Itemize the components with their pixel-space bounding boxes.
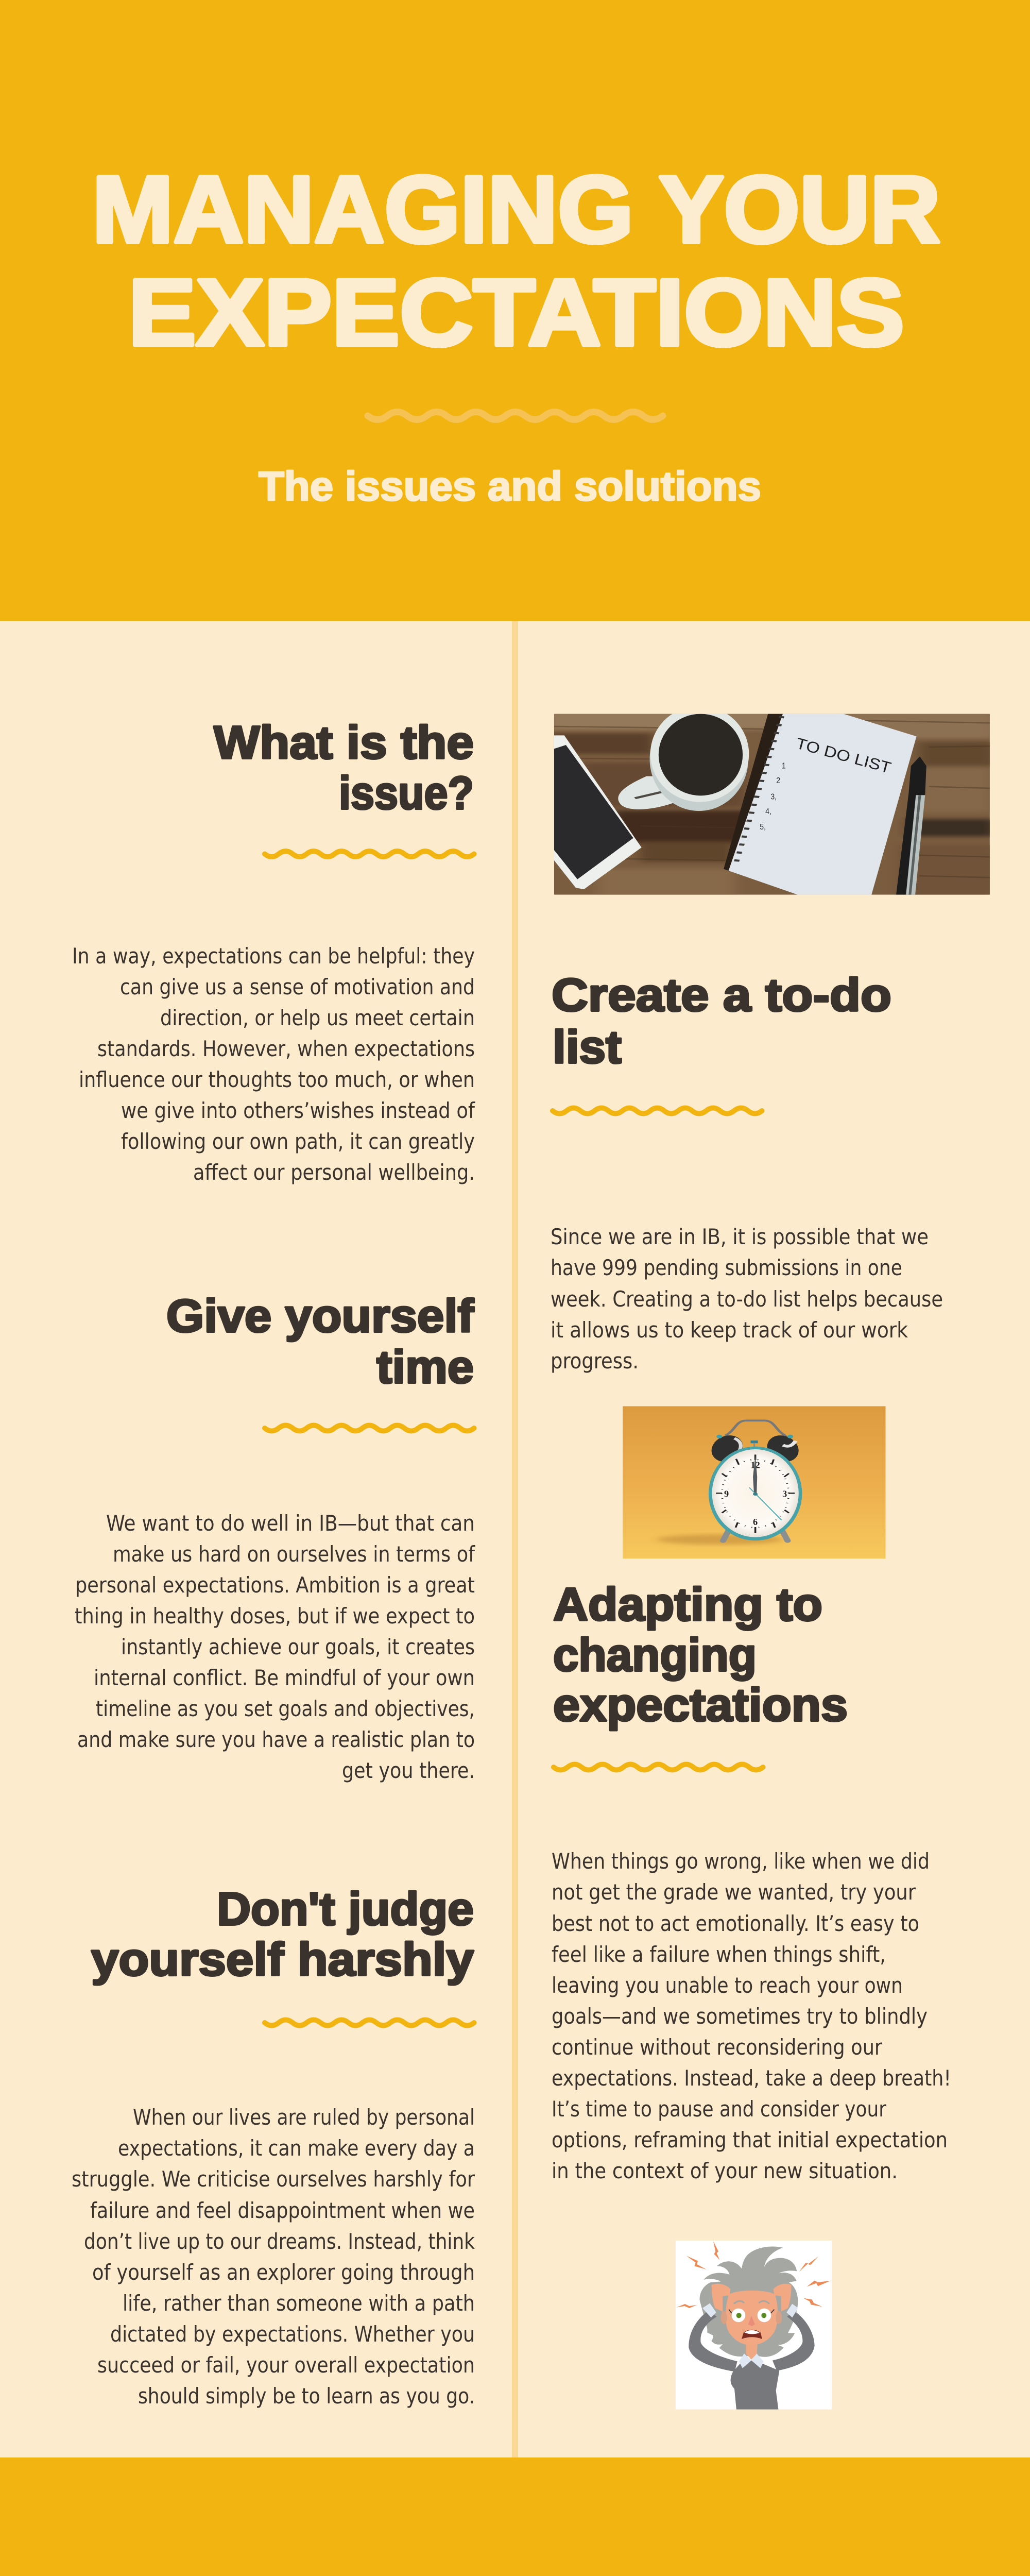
text block: create a to-do list	[551, 1224, 943, 1374]
text block: give yourself time: We want to do well in IB—but that can	[106, 1511, 475, 1536]
clock legs	[723, 1531, 787, 1541]
face	[726, 2291, 778, 2345]
notebook text: 2	[776, 776, 780, 785]
text block: give yourself time	[75, 1511, 476, 1783]
phone	[554, 735, 642, 889]
text block: create a to-do list: week. Creating a to-do list helps because	[551, 1286, 943, 1312]
text block: give yourself time: and make sure you have a realistic plan to	[77, 1727, 475, 1752]
heading: what is the issue	[214, 717, 474, 819]
wave divider	[553, 1108, 762, 1114]
text block: don't judge yourself: failure and feel disappointment when we	[90, 2198, 475, 2223]
nose	[748, 2316, 755, 2326]
title	[92, 156, 940, 365]
text block: issue explanation: we give into others’wishes instead of	[121, 1098, 476, 1123]
panel: footer band	[0, 2458, 1030, 2576]
text block: issue explanation: can give us a sense of motivation and	[120, 974, 475, 999]
text block: issue explanation: direction, or help us meet certain	[160, 1005, 475, 1030]
wood grain streaks	[554, 720, 990, 877]
text block: adapting to changing expectations: in the context of your new situation.	[552, 2158, 898, 2183]
text block: give yourself time: thing in healthy doses, but if we expect to	[75, 1603, 475, 1629]
coffee cup	[618, 706, 749, 811]
wave divider	[265, 851, 474, 857]
text block: issue explanation: In a way, expectations can be helpful: they	[72, 943, 475, 969]
text block: adapting to changing expectations: options, reframing that initial expectation	[552, 2127, 948, 2153]
title: EXPECTATIONS	[128, 259, 904, 365]
text block: create a to-do list: Since we are in IB, it is possible that we	[551, 1224, 929, 1249]
clock bells	[712, 1434, 799, 1461]
text block: give yourself time: get you there.	[342, 1758, 475, 1783]
arms	[689, 2311, 737, 2371]
title: MANAGING YOUR	[92, 156, 940, 262]
heading: give yourself time: Give yourself	[166, 1291, 474, 1342]
panel: header banner	[0, 0, 1030, 621]
neck	[746, 2344, 758, 2360]
clock numerals: 3	[782, 1488, 787, 1499]
text block: don't judge yourself: don’t live up to our dreams. Instead, think	[84, 2229, 475, 2254]
collar	[739, 2353, 751, 2368]
text block: create a to-do list: progress.	[551, 1348, 639, 1374]
panel: create a to-do list	[551, 970, 943, 1374]
cuffs	[702, 2303, 716, 2317]
text block: adapting to changing expectations: It’s time to pause and consider your	[552, 2096, 886, 2122]
heading: give yourself time: time	[376, 1342, 474, 1393]
heading: what is the issue: issue?	[339, 768, 474, 819]
text block: create a to-do list: have 999 pending submissions in one	[551, 1255, 902, 1280]
clock numerals: 12	[750, 1460, 760, 1470]
heading: adapting to changing expectations	[553, 1579, 848, 1731]
heading: don't judge yourself harshly	[91, 1884, 474, 1986]
notebook text: 5,	[760, 822, 766, 832]
stress bolts	[676, 2241, 831, 2308]
illustration: stressed woman pulling her hair	[676, 2241, 832, 2410]
heading: don't judge yourself harshly: yourself harshly	[91, 1934, 474, 1986]
hair	[700, 2246, 798, 2357]
decorative wave under title	[368, 412, 663, 419]
notebook text	[760, 735, 893, 832]
text block: adapting to changing expectations: not get the grade we wanted, try your	[552, 1879, 916, 1905]
text block: don't judge yourself	[72, 2105, 475, 2409]
heading: give yourself time	[166, 1291, 474, 1393]
text block: adapting to changing expectations: goals—and we sometimes try to blindly	[552, 2004, 928, 2029]
notebook text: TO DO LIST	[794, 735, 893, 777]
panel: what is the issue	[72, 717, 476, 1185]
clock numerals: 6	[753, 1517, 758, 1527]
image: alarm clock on orange background	[623, 1406, 886, 1558]
text block: give yourself time: personal expectations. Ambition is a great	[75, 1572, 475, 1598]
text block: issue explanation: standards. However, when expectations	[97, 1036, 475, 1061]
panel: don't judge yourself harshly	[72, 1884, 475, 2409]
notebook	[724, 714, 917, 895]
text block: adapting to changing expectations: best not to act emotionally. It’s easy to	[552, 1911, 919, 1936]
heading: adapting to changing expectations: changing	[553, 1630, 757, 1681]
text block: adapting to changing expectations: expectations. Instead, take a deep breath!	[552, 2065, 951, 2091]
heading: don't judge yourself harshly: Don't judge	[217, 1884, 474, 1935]
mouth	[742, 2330, 762, 2339]
text block: issue explanation: following our own path, it can greatly	[121, 1129, 475, 1154]
clock ticks	[716, 1454, 795, 1533]
notebook text: 1	[782, 761, 786, 771]
panel: adapting to changing expectations	[552, 1579, 951, 2183]
text block: give yourself time: internal conflict. Be mindful of your own	[94, 1665, 475, 1690]
text block: issue explanation	[72, 943, 476, 1185]
text block: don't judge yourself: should simply be to learn as you go.	[138, 2383, 475, 2409]
text block: adapting to changing expectations	[552, 1849, 951, 2183]
text block: don't judge yourself: When our lives are ruled by personal	[133, 2105, 475, 2130]
heading: what is the issue: What is the	[214, 717, 474, 769]
text block: don't judge yourself: life, rather than someone with a path	[123, 2291, 475, 2316]
text block: create a to-do list: it allows us to keep track of our work	[551, 1317, 908, 1343]
centre column divider	[512, 621, 518, 2458]
text block: don't judge yourself: of yourself as an explorer going through	[92, 2260, 475, 2285]
heading: create a to-do list: Create a to-do	[552, 970, 891, 1021]
clock numerals	[724, 1460, 787, 1527]
pen	[896, 756, 926, 895]
text block: adapting to changing expectations: leaving you unable to reach your own	[552, 1973, 903, 1998]
text block: don't judge yourself: expectations, it can make every day a	[118, 2136, 475, 2161]
text block: don't judge yourself: dictated by expectations. Whether you	[110, 2321, 475, 2347]
heading: create a to-do list: list	[553, 1022, 622, 1073]
wave divider	[265, 2020, 474, 2026]
heading: adapting to changing expectations: expectations	[553, 1680, 848, 1731]
wave divider	[554, 1764, 763, 1770]
text block: issue explanation: influence our thoughts too much, or when	[79, 1067, 475, 1092]
text block: issue explanation: affect our personal wellbeing.	[193, 1160, 475, 1185]
heading: create a to-do list	[552, 970, 891, 1073]
subtitle: The issues and solutions	[259, 463, 761, 509]
text block: give yourself time: instantly achieve our goals, it creates	[121, 1634, 475, 1659]
wave divider	[265, 1425, 474, 1431]
clock hands	[749, 1454, 782, 1520]
notebook text: 4,	[765, 807, 771, 816]
text block: don't judge yourself: succeed or fail, your overall expectation	[97, 2352, 475, 2378]
clock handle	[725, 1420, 786, 1436]
text block: adapting to changing expectations: continue without reconsidering our	[552, 2035, 882, 2060]
heading: adapting to changing expectations: Adapting to	[553, 1579, 822, 1631]
clock body	[709, 1447, 802, 1540]
text block: give yourself time: timeline as you set goals and objectives,	[96, 1696, 475, 1721]
panel: give yourself time	[75, 1291, 476, 1783]
text block: give yourself time: make us hard on ourselves in terms of	[113, 1541, 476, 1567]
notebook text: 3,	[770, 792, 777, 802]
brows and eyes	[729, 2301, 774, 2322]
text block: adapting to changing expectations: When things go wrong, like when we did	[552, 1849, 930, 1874]
hands	[712, 2284, 730, 2312]
clock numerals: 9	[724, 1488, 729, 1499]
image: to-do list on a desk	[548, 706, 994, 898]
text block: don't judge yourself: struggle. We criticise ourselves harshly for	[72, 2166, 475, 2192]
text block: adapting to changing expectations: feel like a failure when things shift,	[552, 1942, 886, 1967]
body	[731, 2361, 779, 2410]
